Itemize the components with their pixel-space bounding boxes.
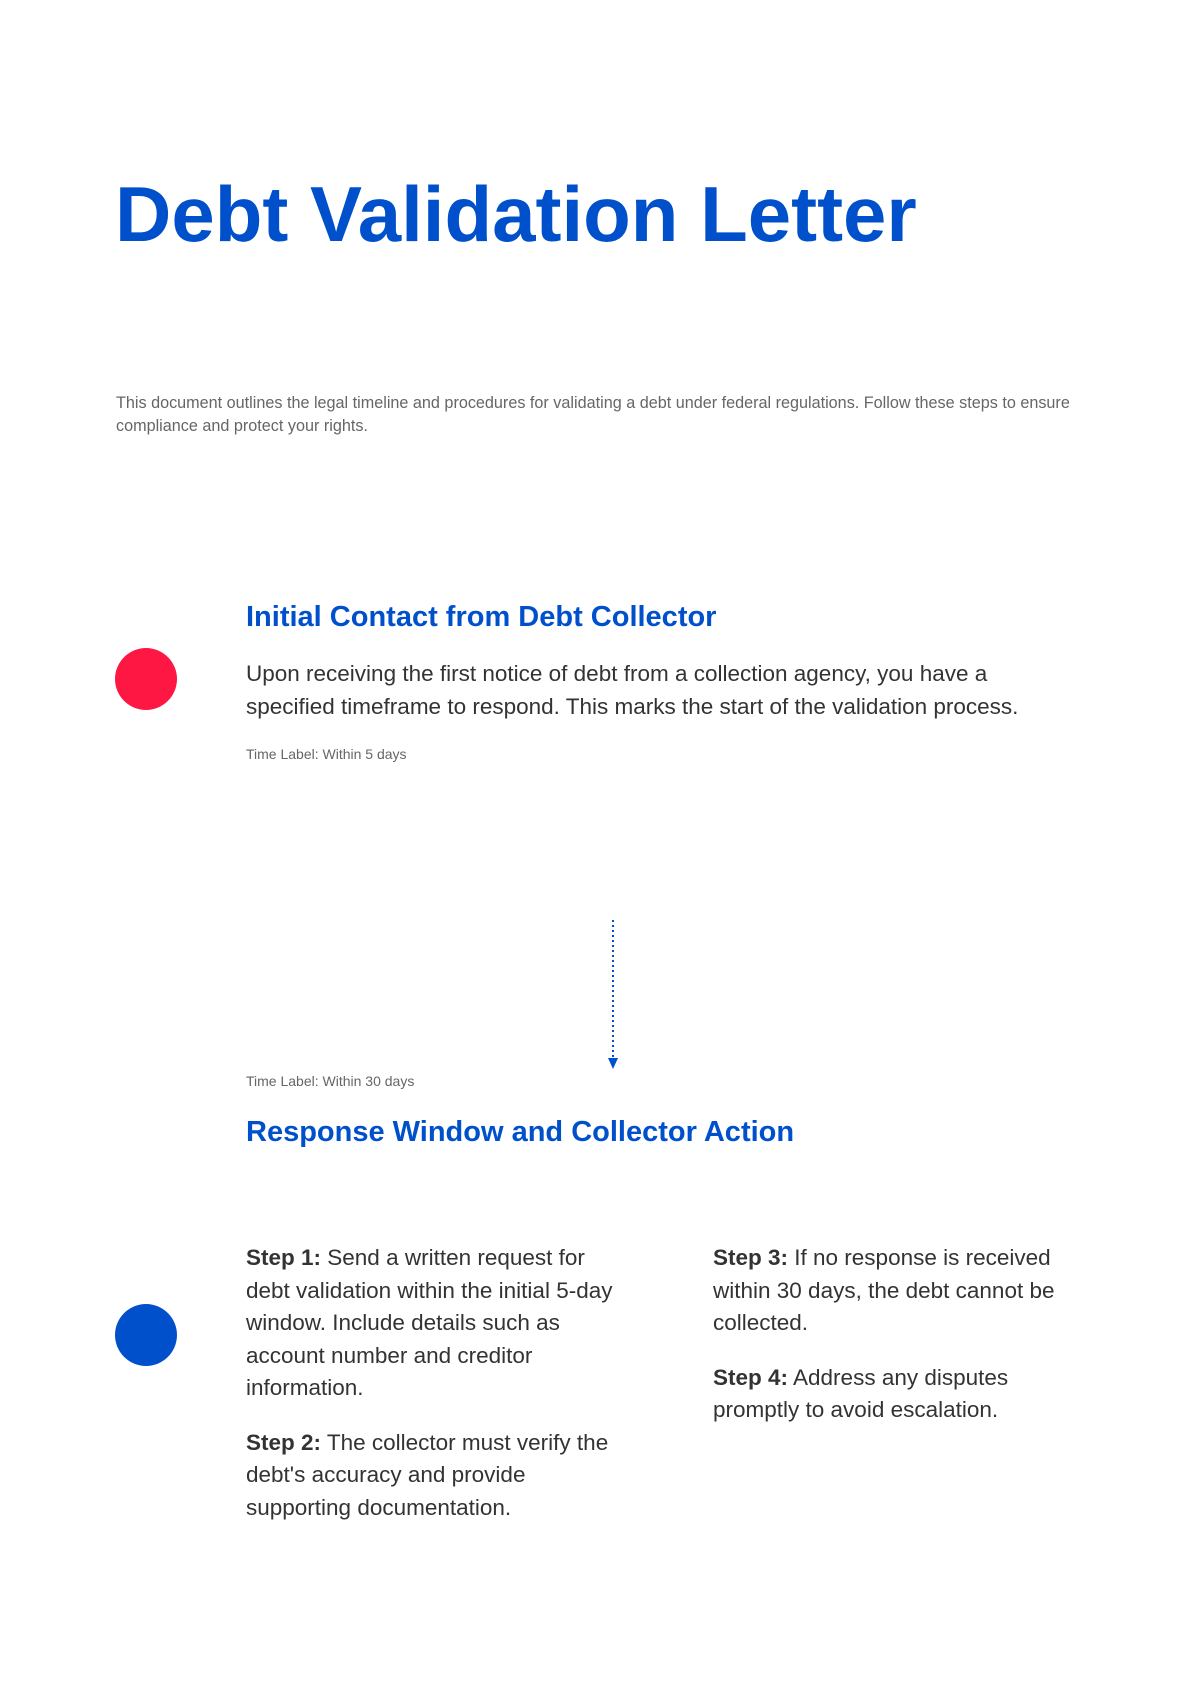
step 1: Step 1: Send a written request for debt validation within the initial 5-day window. Include details such as account number and creditor information. <box>246 1245 612 1400</box>
arrow: dotted <box>608 920 618 1069</box>
heading: initial contact: Initial Contact from Debt Collector <box>246 601 716 633</box>
icon: red dot <box>115 648 177 710</box>
body text: initial contact: Upon receiving the first notice of debt from a collection agency, you have a specified timeframe to respond. This marks the start of the validation process. <box>246 661 1018 718</box>
heading: response window: Response Window and Collector Action <box>246 1116 794 1148</box>
time label 2: Time Label: Within 30 days <box>246 1073 414 1089</box>
steps right column <box>713 1245 1054 1422</box>
icon: blue dot <box>115 1304 177 1366</box>
title: Debt Validation Letter <box>115 170 917 258</box>
step 2: Step 2: The collector must verify the debt's accuracy and provide supporting documentation. <box>246 1430 608 1520</box>
intro text: This document outlines the legal timeline and procedures for validating a debt under federal regulations. Follow these steps to ensure compliance and protect your rights. <box>116 394 1070 435</box>
step 4: Step 4: Address any disputes promptly to avoid escalation. <box>713 1364 1008 1422</box>
steps left column <box>246 1245 612 1520</box>
step 3: Step 3: If no response is received within 30 days, the debt cannot be collected. <box>713 1245 1054 1335</box>
time label 1: Time Label: Within 5 days <box>246 746 407 762</box>
